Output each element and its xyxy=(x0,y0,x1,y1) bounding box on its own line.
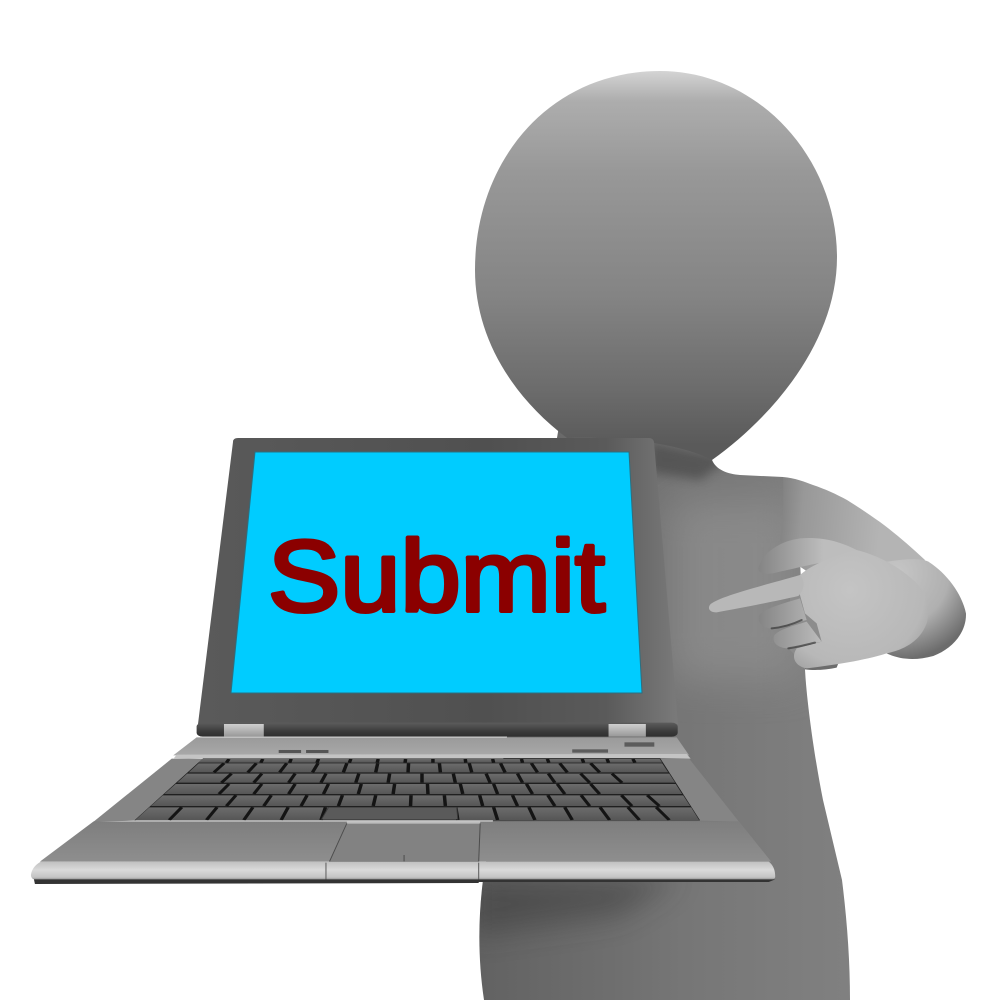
hand palm xyxy=(794,550,929,668)
keyboard xyxy=(134,758,700,820)
right media buttons xyxy=(572,742,654,753)
laptop lid xyxy=(198,438,678,724)
character body xyxy=(479,420,850,1000)
front edge dividers xyxy=(326,863,479,882)
touchpad xyxy=(329,822,480,862)
shadow between fingers xyxy=(790,583,857,667)
front edge xyxy=(31,862,775,880)
character figure xyxy=(470,71,966,1000)
upper deck xyxy=(173,737,689,755)
body shading xyxy=(470,442,800,935)
character upper arm xyxy=(780,477,925,620)
palm rest xyxy=(40,821,771,862)
finger shadows xyxy=(772,620,815,648)
key separators xyxy=(169,759,669,820)
hinge bar xyxy=(197,723,678,737)
left media buttons xyxy=(279,750,328,753)
right keyboard side frame xyxy=(659,759,739,822)
keyboard well xyxy=(134,758,700,820)
index finger xyxy=(709,575,804,612)
underside shadow xyxy=(34,879,775,884)
left keyboard side frame xyxy=(94,759,204,822)
arm and hand xyxy=(709,538,966,670)
deck highlight strip xyxy=(173,754,691,759)
thumb xyxy=(758,538,857,574)
screen word: Submit: Submit xyxy=(268,521,605,633)
spacebar xyxy=(321,807,458,819)
left hinge xyxy=(224,724,264,737)
right hinge xyxy=(609,724,646,737)
wrist cuff xyxy=(887,559,966,659)
key rows xyxy=(135,759,699,820)
laptop base xyxy=(31,723,775,884)
laptop xyxy=(31,438,775,884)
middle finger xyxy=(759,598,807,628)
ring finger xyxy=(774,622,822,648)
character head xyxy=(475,71,837,460)
bottom finger edge xyxy=(805,663,838,670)
laptop screen xyxy=(231,452,642,693)
